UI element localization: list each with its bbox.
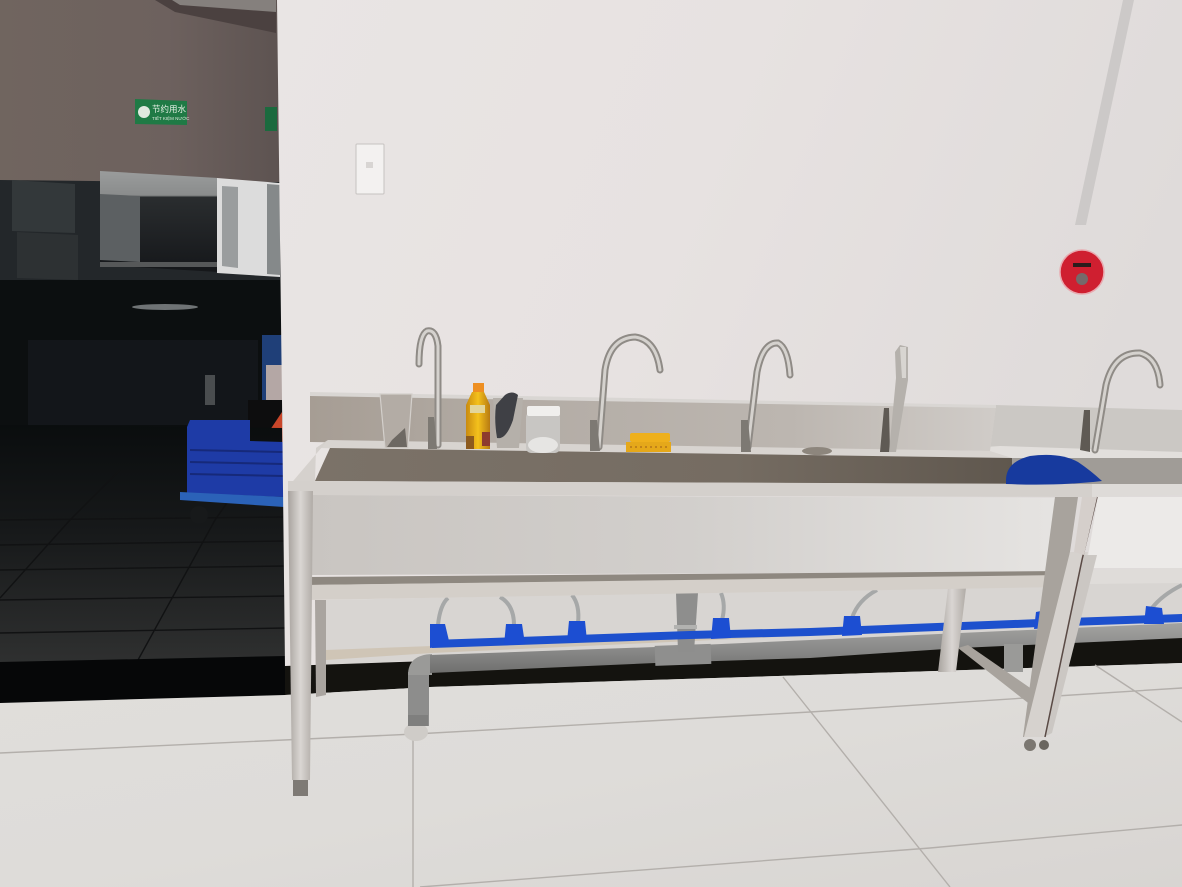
- backsplash: [310, 393, 996, 451]
- faucet 2: [590, 337, 660, 451]
- faucet 1: [419, 331, 438, 449]
- faucet 4: [880, 345, 908, 452]
- drain pipes: [404, 593, 1182, 741]
- drain plug: [802, 447, 832, 455]
- front-left leg: [288, 491, 313, 780]
- black step: [0, 656, 285, 703]
- beige base rail: [326, 632, 800, 660]
- faucet 5: [1080, 353, 1160, 452]
- cup with steel scourer: [493, 392, 523, 448]
- faucet 3: [741, 343, 790, 452]
- front-right leg: [1023, 497, 1097, 751]
- yellow drink bottle: [466, 383, 490, 449]
- floor collar: [404, 723, 428, 741]
- shelf bar: [308, 571, 1062, 600]
- red fire alarm: [1060, 250, 1104, 294]
- yellow scrub brush: [626, 433, 671, 452]
- dark interior shelf: [0, 280, 283, 442]
- stainless sink unit, main: [288, 392, 1097, 796]
- second green sign: [265, 107, 277, 131]
- white floor: [0, 663, 1182, 887]
- shaded lower wall: [326, 582, 1182, 665]
- plastic cup: [380, 394, 412, 448]
- green exit sign: save water: TIẾT KIỆM NƯỚC: [152, 114, 190, 121]
- basin: [315, 448, 1012, 484]
- reflected door panel: [217, 178, 280, 277]
- rear back-left leg: [315, 600, 326, 697]
- tee from sink: [676, 593, 698, 652]
- white wall: [277, 0, 1182, 668]
- green exit sign: save water: 节约用水: [152, 104, 187, 114]
- rear right leg: [938, 588, 966, 672]
- left ledge: [288, 440, 328, 487]
- left foot: [293, 780, 308, 796]
- right brace: [958, 645, 1036, 706]
- front panel: [312, 495, 1066, 575]
- baseboard: [285, 635, 1182, 695]
- backsplash top edge: [310, 392, 996, 408]
- light switch: [356, 144, 384, 194]
- dark tiled floor: [0, 425, 285, 663]
- dark wall tiles: [0, 180, 280, 292]
- ceiling fixture: [155, 0, 276, 33]
- green exit sign: save water: [135, 99, 190, 125]
- blue water line: [430, 585, 1182, 648]
- second sink at right: [970, 405, 1182, 584]
- left room background: [0, 0, 285, 705]
- wall conduit: [1075, 0, 1134, 225]
- front rim: [288, 481, 1092, 497]
- rear floor drain: [1004, 644, 1023, 672]
- blue crate: [180, 420, 284, 524]
- mirror: [100, 171, 218, 272]
- shelf ledge: [316, 440, 1012, 458]
- blue mop on sink edge: [1006, 455, 1102, 485]
- long horizontal drain pipe: [430, 623, 1182, 673]
- vertical drop pipe: [408, 672, 429, 726]
- plastic jar: [526, 406, 560, 453]
- left upper wall: [0, 0, 280, 182]
- fittings and flex hoses: [438, 585, 1182, 625]
